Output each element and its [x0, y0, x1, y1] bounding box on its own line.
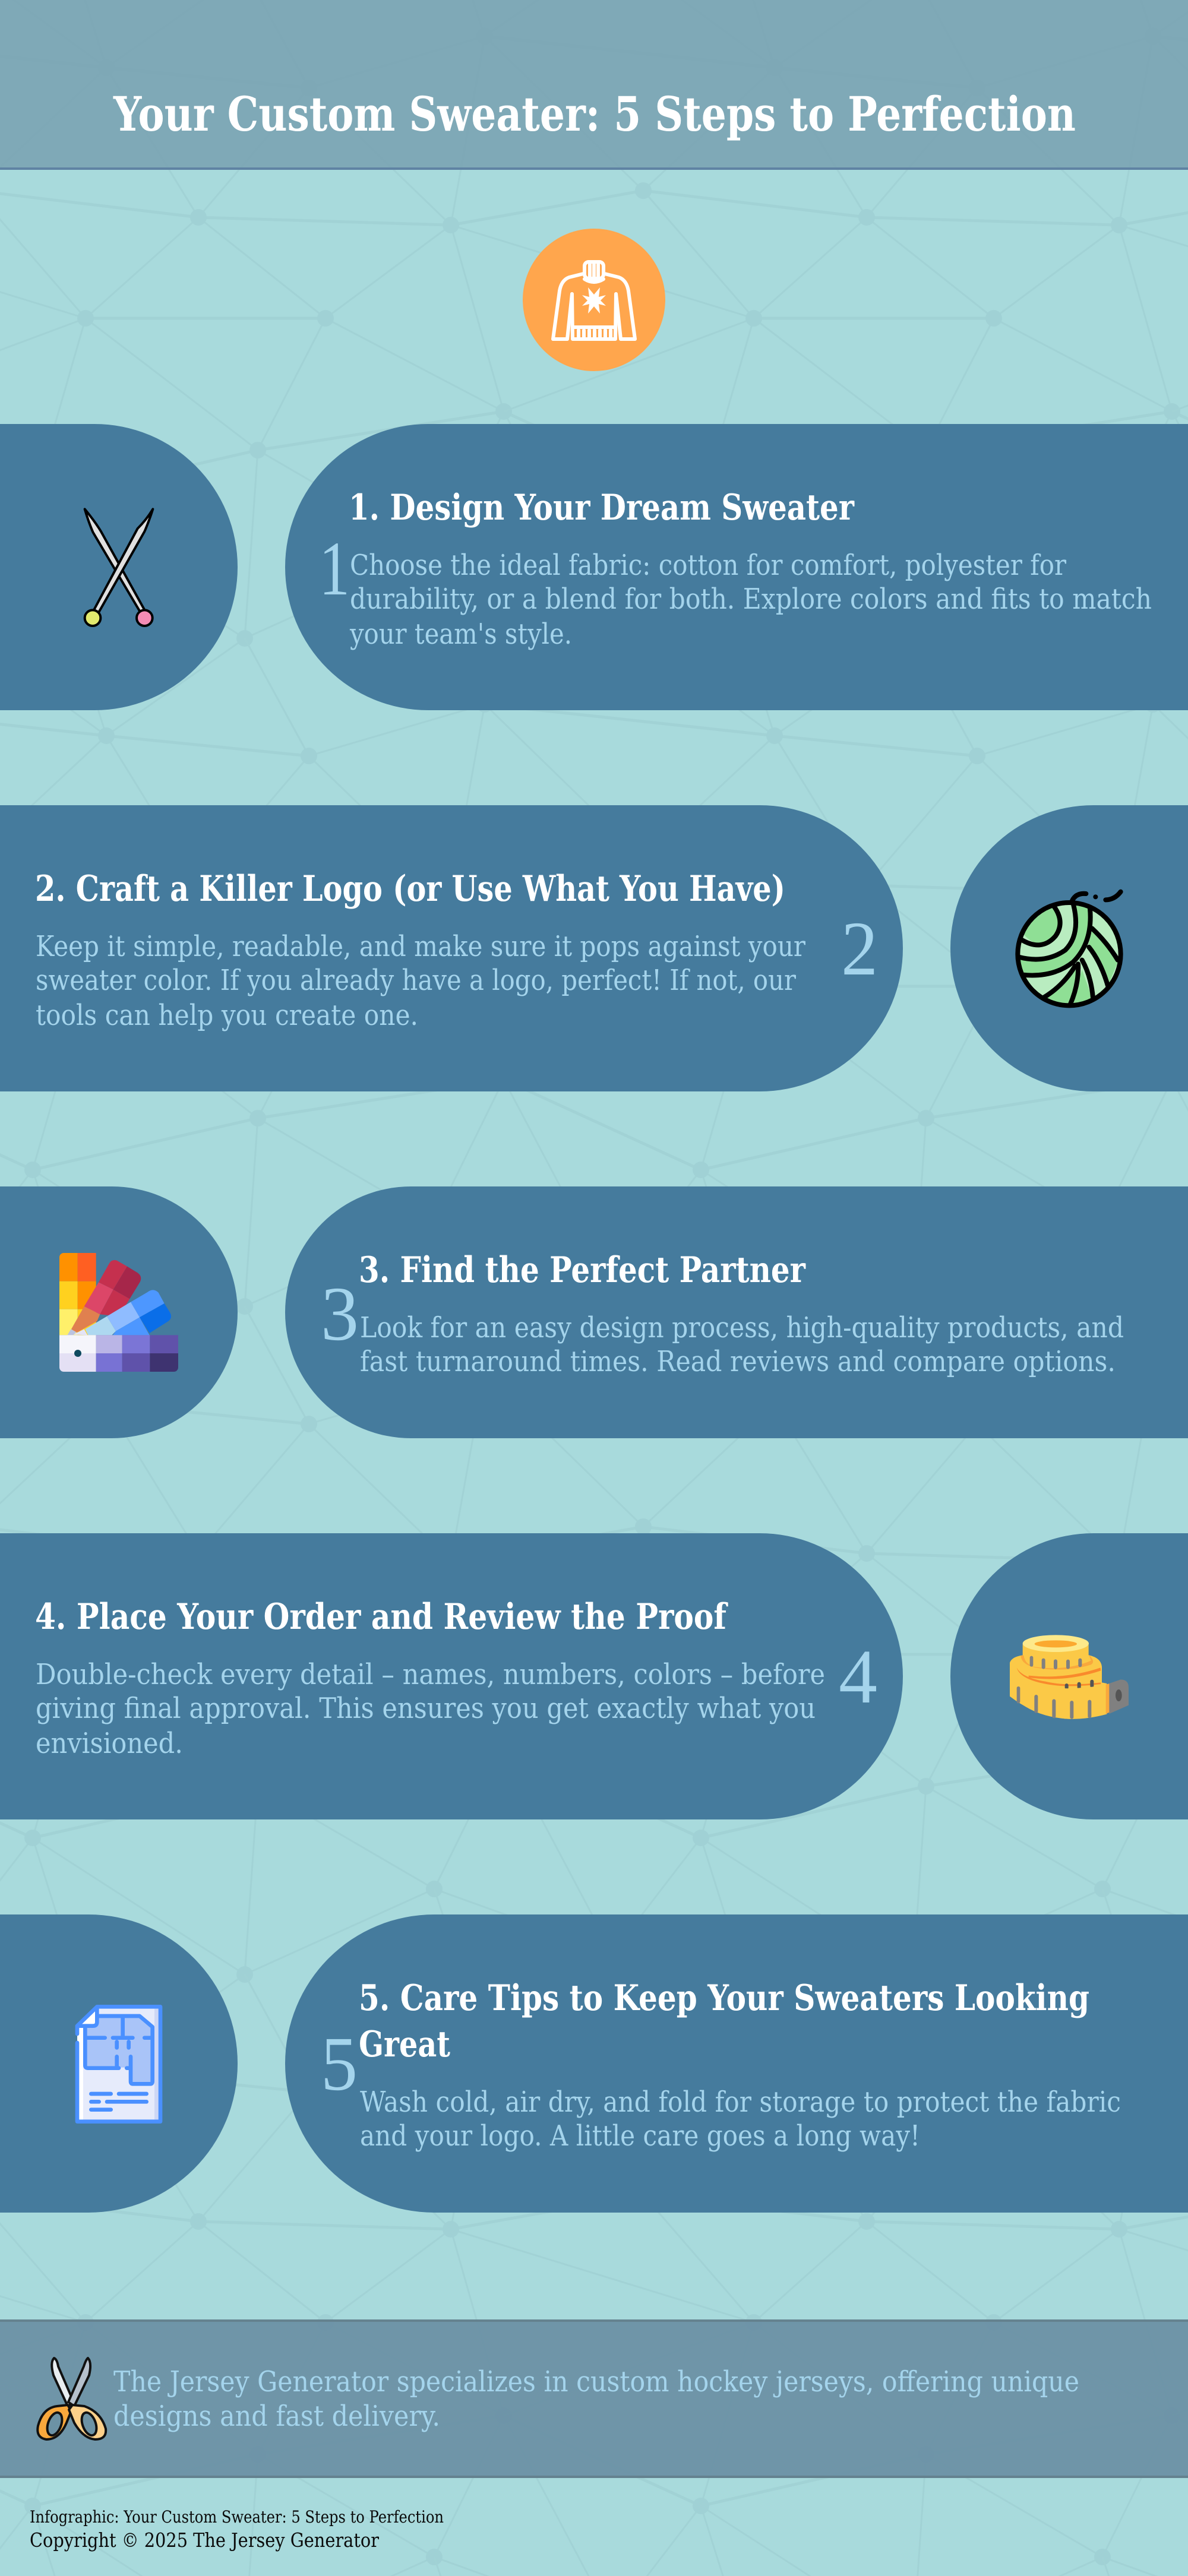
number 5: 5 — [321, 2021, 358, 2107]
credits — [30, 2507, 444, 2552]
body: step 1: your team's style. — [349, 618, 572, 651]
body: step 4 — [36, 1658, 825, 1760]
body: step 5 — [360, 2086, 1121, 2153]
panel: step 5 text — [285, 1914, 1188, 2213]
body: step 2: Keep it simple, readable, and make sure it pops against your — [36, 930, 805, 963]
body: step 5: and your logo. A little care goes a long way! — [360, 2119, 920, 2153]
body: step 2: sweater color. If you already have a logo, perfect! If not, our — [36, 964, 796, 997]
footer text: The Jersey Generator specializes in custom hockey jerseys, offering unique — [113, 2365, 1079, 2398]
body: step 1 — [349, 549, 1152, 651]
icon: knitting needles — [85, 509, 153, 626]
heading: step 5 — [359, 1977, 1089, 2065]
icon: sewing pattern document — [77, 2007, 160, 2122]
icon panel: step 5 — [0, 1914, 238, 2213]
body: step 3: fast turnaround times. Read reviews and compare options. — [360, 1345, 1116, 1378]
number 3: 3 — [321, 1271, 359, 1357]
panel: step 1 text — [285, 424, 1188, 710]
icon panel: step 2 — [950, 805, 1188, 1091]
body: step 1: Choose the ideal fabric: cotton for comfort, polyester for — [350, 549, 1066, 582]
number 1: 1 — [319, 526, 350, 612]
body: step 4: giving final approval. This ensures you get exactly what you — [36, 1692, 816, 1725]
icon: colour swatch fan — [59, 1253, 178, 1372]
panel: step 2 text — [0, 805, 903, 1091]
panel: step 4 text — [0, 1533, 903, 1819]
panel: step 3 text — [285, 1186, 1188, 1438]
step 2 — [0, 805, 1188, 1091]
heading: step 3: 3. Find the Perfect Partner — [359, 1249, 806, 1291]
body: step 4: Double-check every detail – names, numbers, colors – before — [36, 1658, 825, 1691]
body: step 2 — [36, 930, 805, 1032]
footer text: designs and fast delivery. — [113, 2400, 440, 2433]
icon: scissors — [37, 2358, 106, 2439]
body: step 2: tools can help you create one. — [36, 999, 418, 1032]
step 3 — [0, 1186, 1188, 1438]
icon: ball of yarn — [1018, 892, 1121, 1005]
step 1 — [0, 424, 1188, 710]
number 2: 2 — [841, 906, 878, 992]
body: step 3 — [360, 1311, 1124, 1378]
heading: step 2: 2. Craft a Killer Logo (or Use What You Have) — [35, 868, 785, 910]
icon: sweater badge — [523, 229, 665, 371]
credits: Copyright © 2025 The Jersey Generator — [30, 2528, 379, 2552]
footer band — [0, 2319, 1188, 2478]
icon panel: step 1 — [0, 424, 238, 710]
icon: tape measure — [1010, 1635, 1129, 1719]
number 4: 4 — [839, 1634, 877, 1720]
heading: step 5: Great — [359, 2024, 450, 2065]
step 4 — [0, 1533, 1188, 1819]
credits: Infographic: Your Custom Sweater: 5 Steps to Perfection — [30, 2507, 444, 2527]
icon panel: step 4 — [950, 1533, 1188, 1819]
icon panel: step 3 — [0, 1186, 238, 1438]
step 5 — [0, 1914, 1188, 2213]
body: step 4: envisioned. — [36, 1727, 183, 1760]
heading: step 1: 1. Design Your Dream Sweater — [349, 487, 855, 529]
footer text — [113, 2365, 1079, 2433]
header band — [0, 0, 1188, 170]
heading: step 4: 4. Place Your Order and Review the Proof — [35, 1596, 728, 1638]
